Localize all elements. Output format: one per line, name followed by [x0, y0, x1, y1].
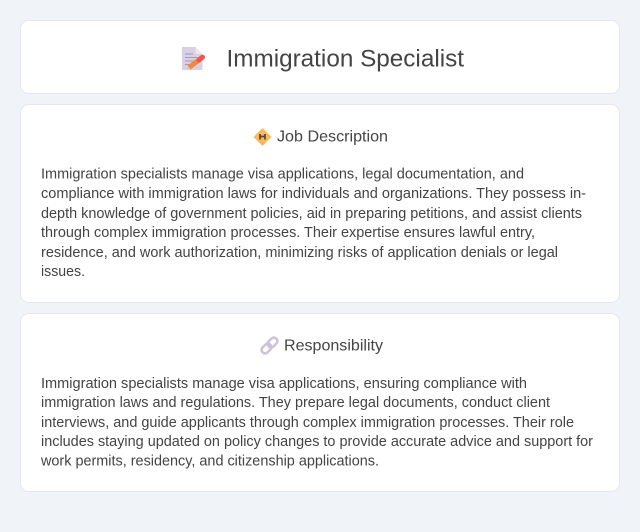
text block: responsibility: includes staying updated on policy changes to provide accurate advice and support for: [41, 434, 593, 450]
heading: responsibility: Responsibility: [284, 338, 383, 354]
text block: job description: [41, 166, 586, 280]
text block: job description: issues.: [41, 264, 85, 280]
text block: responsibility: work permits, residency, and citizenship applications.: [40, 454, 379, 470]
text block: job description: residence, and work authorization, minimizing risks of application denials or legal: [41, 245, 558, 261]
panel: title card: [20, 20, 620, 94]
icon: road sign diamond: [254, 129, 270, 145]
text block: responsibility: immigration laws and regulations. They prepare legal documents, conduct client: [41, 395, 550, 411]
panel: responsibility: [20, 314, 620, 492]
panel: job description: [20, 104, 620, 302]
text block: job description: Immigration specialists manage visa applications, legal documentation, and: [41, 166, 524, 182]
title: Immigration Specialist: [226, 46, 464, 72]
text block: job description: through complex immigration processes. Their expertise ensures lawful entry,: [41, 225, 535, 241]
heading: job description: Job Description: [277, 128, 388, 146]
icon: chain link: [260, 336, 279, 355]
text block: responsibility: Immigration specialists manage visa applications, ensuring compliance with: [41, 376, 527, 392]
text block: job description: compliance with immigration laws for individuals and organizations. They possess in-: [41, 186, 586, 202]
text block: responsibility: interviews, and guide applicants through complex immigration processes. Their role: [41, 415, 574, 431]
icon: document with pencil: [182, 47, 202, 70]
text block: job description: depth knowledge of government policies, aid in preparing petitions, and assist clients: [41, 206, 582, 222]
text block: responsibility: [40, 376, 593, 470]
